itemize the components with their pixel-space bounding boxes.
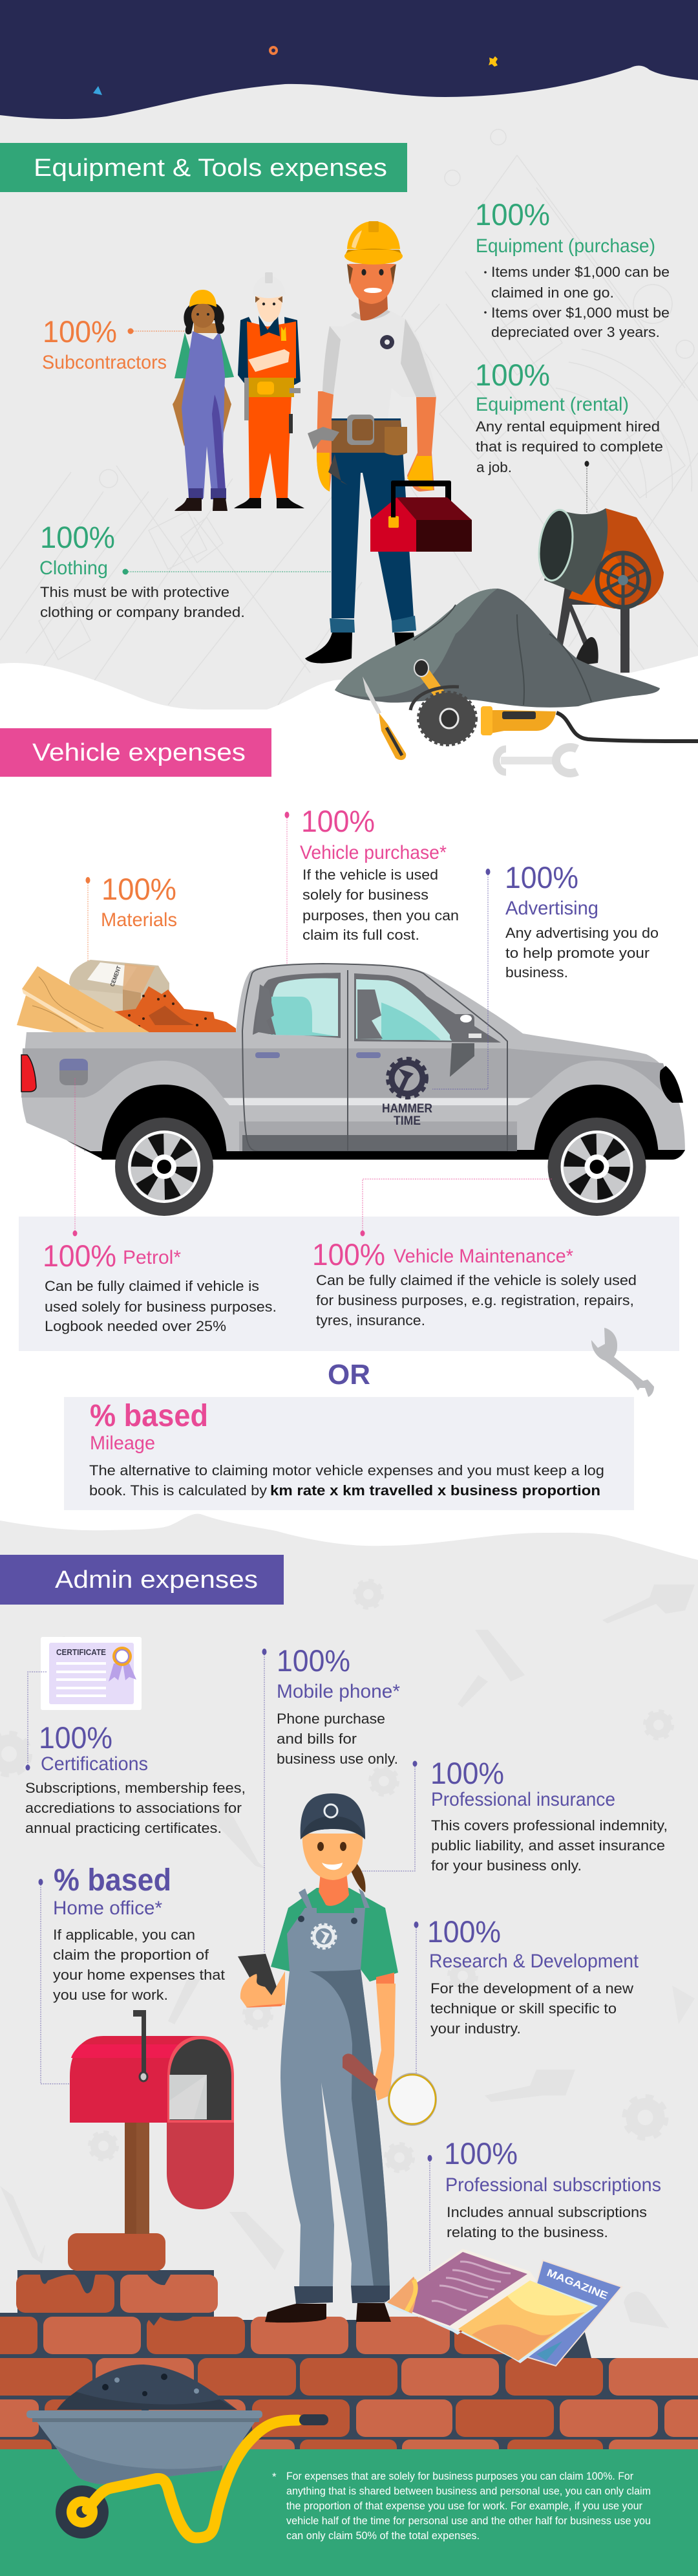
callout: subcontractors: Subcontractors xyxy=(42,352,167,373)
callout: vehicle purchase: purposes, then you can xyxy=(302,907,459,924)
heading: Equipment and Tools xyxy=(0,143,407,192)
callout: equipment rental: a job. xyxy=(476,459,512,475)
callout: advertising xyxy=(432,860,659,1089)
callout: professional insurance: for your business only. xyxy=(431,1857,582,1874)
callout: subcontractors: 100% xyxy=(43,314,117,349)
callout: equipment rental: Any rental equipment hired xyxy=(476,418,660,435)
panel: mileage xyxy=(64,1397,634,1510)
callout: mobile phone xyxy=(262,1643,400,1953)
footnote xyxy=(272,2470,651,2542)
header confetti xyxy=(93,47,498,95)
illustration: pickup truck: TIME xyxy=(394,1114,421,1128)
callout: certifications xyxy=(25,1672,246,1836)
callout: equipment purchase: Items under $1,000 can be xyxy=(491,264,670,280)
callout: equipment purchase: depreciated over 3 years. xyxy=(491,324,660,340)
callout: home office: claim the proportion of xyxy=(53,1947,209,1963)
callout: vehicle purchase: If the vehicle is used xyxy=(302,867,438,883)
icon: cement bag xyxy=(69,960,169,1022)
callout: certifications: annual practicing certificates. xyxy=(25,1820,222,1836)
callout: equipment purchase: 100% xyxy=(475,197,550,232)
callout: advertising: Advertising xyxy=(505,898,598,919)
callout: mobile phone: Mobile phone* xyxy=(277,1681,400,1702)
white wave below equipment section xyxy=(0,656,698,718)
footnote: For expenses that are solely for business purposes you can claim 100%. For xyxy=(286,2470,633,2482)
footnote: can only claim 50% of the total expenses. xyxy=(286,2529,480,2542)
callout: home office: you use for work. xyxy=(53,1987,168,2003)
callout: petrol: Petrol* xyxy=(123,1247,181,1268)
admin section background xyxy=(0,1514,698,2458)
callout: professional insurance: public liability, and asset insurance xyxy=(431,1837,665,1854)
callout: equipment purchase: Equipment (purchase) xyxy=(476,235,655,257)
callout: materials xyxy=(85,872,177,969)
callout: vehicle purchase xyxy=(284,804,459,966)
icon: pile of sand xyxy=(335,589,660,708)
panel: mileage: % based xyxy=(90,1399,208,1433)
panel: mileage: The alternative to claiming motor vehicle expenses and you must keep a log xyxy=(89,1462,604,1478)
faint tool pattern xyxy=(0,1581,695,2328)
callout: vehicle maintenance: for business purposes, e.g. registration, repairs, xyxy=(316,1292,634,1308)
callout: professional subscriptions xyxy=(428,2136,661,2284)
figure: worker in orange vest xyxy=(234,272,304,508)
panel: petrol and maintenance xyxy=(19,1078,679,1351)
callout: home office: If applicable, you can xyxy=(53,1927,195,1943)
callout: research and development: your industry. xyxy=(430,2020,521,2037)
heading: Vehicle expenses: Vehicle expenses xyxy=(32,739,246,766)
icon: open magazine xyxy=(384,2249,622,2366)
heading: Vehicle expenses xyxy=(0,728,271,777)
brick wall xyxy=(0,2233,698,2459)
callout: advertising: business. xyxy=(505,964,568,980)
panel: mileage: km rate x km travelled x business proportion xyxy=(270,1482,600,1499)
callout: certifications: 100% xyxy=(39,1720,112,1755)
figure: lead tradesman with hard hat xyxy=(305,221,436,666)
callout: subcontractors xyxy=(42,314,187,373)
figure: woman tradie with phone and magnifier xyxy=(238,1793,436,2322)
callout: equipment purchase xyxy=(475,197,670,340)
callout: home office: % based xyxy=(54,1863,171,1898)
callout: equipment rental xyxy=(475,358,663,475)
callout: research and development: technique or skill specific to xyxy=(430,2000,617,2017)
callout: certifications: Subscriptions, membership fees, xyxy=(25,1780,246,1796)
icon: open magazine: MAGAZINE xyxy=(545,2268,609,2302)
callout: clothing xyxy=(39,520,338,620)
callout: research and development: 100% xyxy=(427,1914,501,1949)
footnote: * xyxy=(272,2471,277,2483)
footnote: the proportion of that expense you use for work. For example, if you use your xyxy=(286,2500,642,2512)
callout: certifications: Certifications xyxy=(41,1753,148,1775)
callout: professional subscriptions: relating to the business. xyxy=(447,2224,608,2240)
callout: vehicle maintenance: tyres, insurance. xyxy=(316,1312,425,1328)
callout: advertising: to help promote your xyxy=(505,945,650,961)
callout: research and development: Research & Development xyxy=(429,1951,639,1972)
callout: research and development: For the development of a new xyxy=(430,1980,634,1997)
blueprint background pattern xyxy=(0,129,698,705)
callout: professional subscriptions: Professional subscriptions xyxy=(445,2174,661,2196)
icon: certificate xyxy=(41,1637,142,1710)
panel: mileage: Mileage xyxy=(90,1433,155,1454)
callout: clothing: This must be with protective xyxy=(40,584,229,600)
callout: clothing: clothing or company branded. xyxy=(40,604,245,620)
callout: equipment rental: Equipment (rental) xyxy=(476,394,629,415)
icon: cement mixer xyxy=(535,460,664,673)
callout: mobile phone: business use only. xyxy=(277,1751,398,1767)
callout: petrol: Can be fully claimed if vehicle is xyxy=(45,1278,259,1294)
callout: mobile phone: 100% xyxy=(277,1643,350,1678)
callout: equipment rental: that is required to complete xyxy=(476,438,663,455)
callout: petrol xyxy=(43,1078,277,1334)
callout: vehicle maintenance xyxy=(312,1179,637,1328)
icon: angle grinder xyxy=(410,660,698,744)
callout: professional subscriptions: 100% xyxy=(444,2136,518,2170)
callout: petrol: used solely for business purposes. xyxy=(45,1299,277,1315)
icon: wood boards xyxy=(17,966,149,1032)
callout: vehicle maintenance: Vehicle Maintenance* xyxy=(394,1246,573,1267)
callout: home office: Home office* xyxy=(53,1898,162,1919)
icon: certificate: CERTIFICATE xyxy=(56,1647,106,1657)
callout: materials: Materials xyxy=(101,909,177,931)
heading: Equipment and Tools: Equipment & Tools expenses xyxy=(34,155,387,182)
callout: professional insurance: 100% xyxy=(430,1756,504,1790)
header wave xyxy=(0,0,698,119)
callout: equipment rental: 100% xyxy=(475,358,550,392)
callout: vehicle purchase: claim its full cost. xyxy=(302,927,419,943)
icon: stacked bricks xyxy=(109,986,236,1032)
icon: mailbox xyxy=(70,2010,234,2234)
illustration: pickup truck xyxy=(21,964,685,1216)
callout: vehicle purchase: Vehicle purchase* xyxy=(300,842,447,863)
callout: clothing: 100% xyxy=(40,520,115,554)
callout: professional subscriptions: Includes annual subscriptions xyxy=(447,2204,647,2220)
icon: wheelbarrow xyxy=(26,2365,328,2538)
callout: equipment purchase: claimed in one go. xyxy=(491,285,614,301)
callout: professional insurance: This covers professional indemnity, xyxy=(431,1817,668,1834)
callout: vehicle purchase: 100% xyxy=(301,804,375,838)
callout: petrol: Logbook needed over 25% xyxy=(45,1318,226,1334)
callout: vehicle purchase: solely for business xyxy=(302,887,428,903)
callout: advertising: 100% xyxy=(505,860,578,894)
callout: home office: your home expenses that xyxy=(53,1967,226,1983)
callout: clothing: Clothing xyxy=(39,557,108,579)
callout: professional insurance: Professional insurance xyxy=(431,1789,615,1810)
callout: research and development xyxy=(414,1914,639,2084)
icon: cement bag: CEMENT xyxy=(109,965,122,988)
icon: wrench xyxy=(591,1328,654,1397)
callout: professional insurance xyxy=(354,1756,668,1874)
callout: petrol: 100% xyxy=(43,1239,116,1273)
callout: mobile phone: Phone purchase xyxy=(277,1711,385,1727)
icon: red toolbox xyxy=(370,481,472,552)
footnote: vehicle half of the time for personal use and the other half for business use you xyxy=(286,2515,651,2527)
heading: Admin expenses: Admin expenses xyxy=(55,1566,258,1594)
footer band xyxy=(0,2449,698,2576)
callout: advertising: Any advertising you do xyxy=(505,925,659,941)
footnote: anything that is shared between business and personal use, you can only claim xyxy=(286,2485,651,2497)
panel: mileage: book. This is calculated by xyxy=(89,1482,268,1499)
icon: faint wrench xyxy=(496,748,577,774)
callout: home office xyxy=(39,1863,226,2084)
OR label: OR xyxy=(328,1359,370,1391)
callout: vehicle maintenance: Can be fully claimed if the vehicle is solely used xyxy=(316,1272,637,1288)
illustration: pickup truck: HAMMER xyxy=(382,1102,432,1116)
callout: equipment purchase: Items over $1,000 must be xyxy=(491,305,670,321)
callout: certifications: accrediations to associations for xyxy=(25,1800,242,1816)
icon: screwdriver xyxy=(363,676,406,760)
callout: mobile phone: and bills for xyxy=(277,1731,357,1747)
heading: Admin expenses xyxy=(0,1555,284,1605)
callout: materials: 100% xyxy=(101,872,176,906)
callout: vehicle maintenance: 100% xyxy=(312,1237,385,1272)
figure: woman worker in overalls xyxy=(173,290,234,511)
